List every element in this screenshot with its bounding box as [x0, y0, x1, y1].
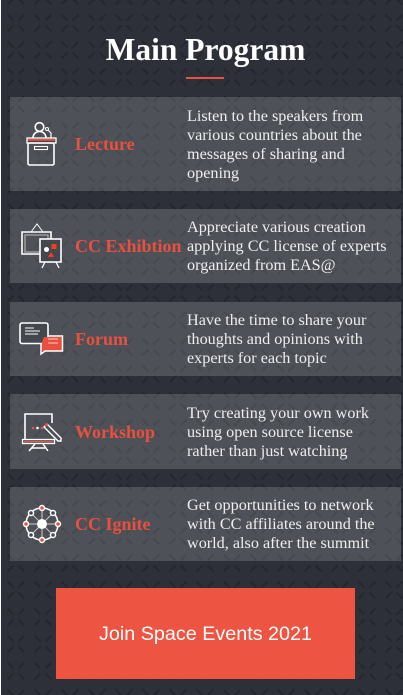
- description: exhibition: applying CC license of experts: [187, 237, 387, 255]
- icon: easel and pencil: [22, 413, 62, 452]
- description: workshop: rather than just watching: [187, 442, 347, 460]
- icon: speech bubbles: [19, 322, 64, 356]
- panel: forum: [10, 302, 401, 376]
- description: lecture: [187, 106, 363, 182]
- description: lecture: messages of sharing and: [187, 144, 345, 162]
- description: forum: [187, 311, 366, 367]
- description: workshop: using open source license: [187, 423, 353, 441]
- description: exhibition: Appreciate various creation: [187, 218, 366, 236]
- description: ignite: world, also after the summit: [187, 534, 369, 552]
- label: exhibition: CC Exhibtion: [75, 236, 182, 256]
- panel: ignite: [10, 487, 401, 561]
- description: lecture: Listen to the speakers from: [187, 106, 363, 124]
- description: ignite: Get opportunities to network: [187, 496, 374, 514]
- description: ignite: [187, 496, 375, 552]
- description: exhibition: organized from EAS@: [187, 256, 336, 274]
- description: ignite: with CC affiliates around the: [187, 515, 375, 533]
- title: Main Program: [106, 32, 305, 67]
- icon: network wheel: [22, 504, 62, 544]
- label: forum: Forum: [75, 329, 128, 349]
- title underline: [186, 77, 224, 79]
- description: lecture: various countries about the: [187, 126, 362, 144]
- label: workshop: Workshop: [75, 422, 155, 442]
- icon: lectern: [26, 122, 57, 166]
- panel: lecture: [10, 97, 401, 191]
- description: forum: Have the time to share your: [187, 311, 366, 329]
- panel: workshop: [10, 394, 401, 469]
- description: lecture: opening: [187, 164, 239, 182]
- icon: art boards: [21, 223, 62, 268]
- description: forum: thoughts and opinions with: [187, 330, 363, 348]
- label: lecture: Lecture: [75, 134, 135, 154]
- description: workshop: [187, 404, 369, 460]
- label: ignite: CC Ignite: [75, 514, 150, 534]
- panel: exhibition: [10, 209, 401, 283]
- description: workshop: Try creating your own work: [187, 404, 369, 422]
- description: forum: experts for each topic: [187, 349, 327, 367]
- description: exhibition: [187, 218, 387, 274]
- button: join: [56, 588, 355, 679]
- button: join: Join Space Events 2021: [99, 623, 312, 645]
